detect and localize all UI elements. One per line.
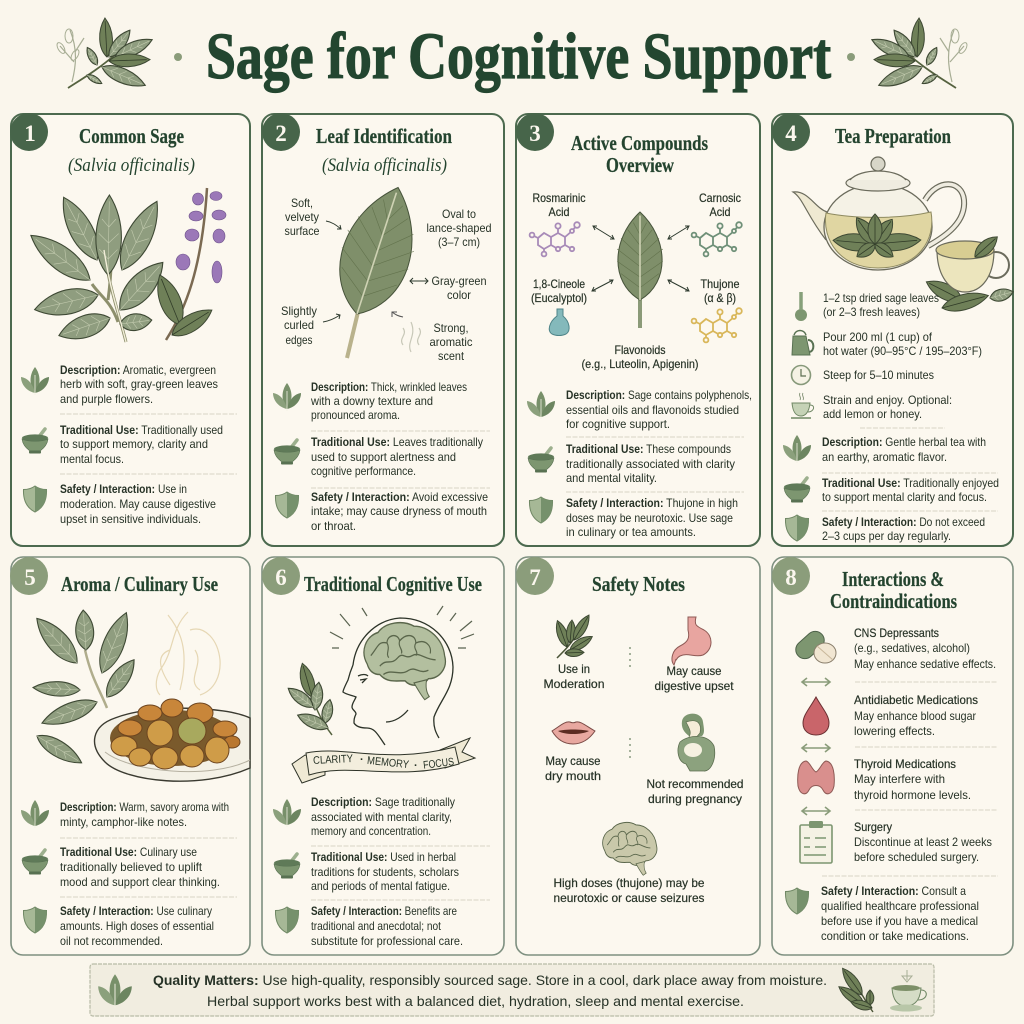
label bbox=[544, 662, 604, 691]
traditional use bbox=[22, 423, 223, 466]
safety: in culinary or tea amounts. bbox=[566, 525, 696, 539]
molecule: thujone bbox=[692, 308, 742, 342]
number badge 2 bbox=[262, 113, 300, 151]
heading: (Salvia officinalis) bbox=[68, 155, 195, 176]
compound labels: (Eucalyptol) bbox=[531, 291, 587, 305]
number badge 5: 5 bbox=[24, 565, 36, 590]
text: antidiabetic: lowering effects. bbox=[854, 724, 935, 738]
traditional use: Traditional Use: Traditionally enjoyed bbox=[822, 476, 999, 490]
icon: scent wisps bbox=[402, 322, 420, 352]
traditional use: traditionally associated with clarity bbox=[566, 457, 735, 471]
leaf labels: Strong, bbox=[434, 321, 468, 335]
safety: substitute for professional care. bbox=[311, 934, 463, 948]
leaf labels: color bbox=[447, 288, 471, 302]
text: CNS depressants bbox=[854, 626, 996, 671]
description: with a downy texture and bbox=[310, 394, 433, 408]
description: Description: Sage traditionally bbox=[311, 795, 455, 809]
panel: safety notes bbox=[516, 557, 760, 955]
safety bbox=[23, 482, 216, 526]
safety: traditional and anecdotal; not bbox=[311, 919, 442, 933]
label: Use in bbox=[558, 662, 590, 676]
steps bbox=[791, 291, 982, 421]
traditional use: Traditional Use: Culinary use bbox=[60, 845, 197, 859]
icon: sage sprig bbox=[836, 965, 874, 1012]
description bbox=[21, 800, 229, 829]
safety bbox=[529, 496, 738, 539]
traditional use: to support mental clarity and focus. bbox=[822, 490, 987, 504]
heading: Contraindications bbox=[830, 589, 957, 613]
text: thyroid bbox=[854, 757, 971, 802]
arrow bbox=[802, 807, 830, 815]
leaf labels: Soft, bbox=[291, 196, 313, 210]
heading: Overview bbox=[606, 153, 675, 177]
compound labels: Flavonoids bbox=[614, 343, 666, 357]
traditional use: traditions for students, scholars bbox=[311, 865, 459, 879]
banner: clarity memory focus bbox=[292, 738, 475, 783]
leaf labels: aromatic bbox=[430, 335, 472, 349]
number badge 7 bbox=[516, 557, 554, 595]
safety: Safety / Interaction: Use in bbox=[60, 482, 187, 496]
illustration: labelled leaf bbox=[324, 177, 431, 358]
traditional use: to support memory, clarity and bbox=[60, 437, 208, 451]
safety: before use if you have a medical bbox=[821, 914, 978, 928]
heading bbox=[68, 124, 195, 176]
illustration: glass teapot bbox=[793, 157, 964, 270]
steps: Pour 200 ml (1 cup) of bbox=[823, 330, 933, 344]
traditional use: Traditional Use: Used in herbal bbox=[311, 850, 456, 864]
text: surgery: Discontinue at least 2 weeks bbox=[854, 835, 992, 849]
compound labels: Rosmarinic bbox=[532, 191, 586, 205]
compound arrows bbox=[592, 226, 689, 291]
compound labels: (e.g., Luteolin, Apigenin) bbox=[582, 357, 699, 371]
panel frame bbox=[516, 114, 760, 546]
illustration: aroma steam bbox=[156, 612, 220, 695]
compound labels: Acid bbox=[548, 205, 570, 219]
footer callout: quality matters bbox=[90, 964, 934, 1016]
illustration: sage sprig bbox=[285, 662, 335, 735]
label: High doses (thujone) may be bbox=[554, 876, 705, 890]
safety bbox=[23, 904, 214, 948]
arrow bbox=[802, 678, 830, 686]
icon: header sage sprig left bbox=[55, 18, 155, 92]
description: pronounced aroma. bbox=[311, 408, 400, 422]
leaf labels: Oval to bbox=[442, 207, 476, 221]
safety: oil not recommended. bbox=[60, 934, 163, 948]
traditional use: Traditional Use: Traditionally used bbox=[60, 423, 223, 437]
text: quality matters bbox=[153, 972, 827, 1009]
panel frame bbox=[516, 557, 760, 955]
safety bbox=[785, 884, 979, 943]
safety: Safety / Interaction: Thujone in high bbox=[566, 496, 738, 510]
illustration: tea cup bbox=[923, 232, 1015, 315]
safety: qualified healthcare professional bbox=[821, 899, 979, 913]
description: and purple flowers. bbox=[60, 392, 153, 406]
description: essential oils and flavonoids studied bbox=[566, 403, 739, 417]
text: antidiabetic: Antidiabetic Medications bbox=[854, 693, 978, 707]
heading: Traditional Cognitive Use bbox=[304, 572, 482, 596]
description: Description: Aromatic, evergreen bbox=[60, 363, 216, 377]
steps: (or 2–3 fresh leaves) bbox=[823, 305, 920, 319]
description bbox=[783, 435, 986, 464]
heading: Leaf Identification bbox=[316, 124, 452, 148]
text: thyroid: thyroid hormone levels. bbox=[854, 788, 971, 802]
text: surgery bbox=[854, 820, 992, 864]
panel frame bbox=[11, 114, 250, 546]
leaf labels: lance-shaped bbox=[426, 221, 492, 235]
text: surgery: before scheduled surgery. bbox=[854, 850, 979, 864]
text: quality matters: Herbal support works best with a balanced diet, hydration, sleep and mental exercise. bbox=[207, 993, 744, 1009]
icon: pills bbox=[792, 628, 836, 663]
steps: Strain and enjoy. Optional: bbox=[823, 393, 952, 407]
icon: header sage sprig right bbox=[869, 18, 969, 92]
label: neurotoxic or cause seizures bbox=[554, 891, 704, 905]
safety bbox=[785, 515, 985, 543]
compound labels bbox=[531, 191, 741, 371]
label: Not recommended bbox=[646, 777, 744, 791]
panel: tea preparation bbox=[772, 113, 1015, 546]
description bbox=[273, 380, 467, 422]
panel frame bbox=[11, 557, 250, 955]
compound labels: Thujone bbox=[700, 277, 740, 291]
number badge 7: 7 bbox=[529, 565, 541, 590]
central leaf bbox=[617, 212, 663, 328]
icon: pregnant figure bbox=[678, 714, 715, 771]
label: during pregnancy bbox=[648, 792, 742, 806]
compound labels: Acid bbox=[710, 205, 730, 219]
illustration: head profile bbox=[343, 618, 453, 745]
safety: moderation. May cause digestive bbox=[60, 497, 216, 511]
label: dry mouth bbox=[545, 769, 601, 783]
molecule: carnosic acid bbox=[692, 222, 742, 256]
icon: stacked dots bbox=[629, 647, 631, 758]
leaf labels: Slightly bbox=[281, 304, 317, 318]
text: CNS depressants: (e.g., sedatives, alcohol) bbox=[854, 641, 970, 655]
leaf labels: surface bbox=[284, 224, 320, 238]
label bbox=[554, 876, 705, 905]
arrow bbox=[802, 744, 830, 752]
panel: interactions bbox=[772, 557, 1013, 955]
icon: spoon bbox=[795, 292, 807, 321]
callout frame bbox=[90, 964, 934, 1016]
title dot right bbox=[847, 53, 855, 61]
leaf labels: scent bbox=[438, 349, 465, 363]
safety: Safety / Interaction: Benefits are bbox=[311, 904, 457, 918]
panel frame bbox=[772, 114, 1013, 546]
description: for cognitive support. bbox=[566, 417, 670, 431]
traditional use bbox=[274, 435, 483, 478]
description bbox=[21, 363, 218, 406]
banner: clarity memory focus: · bbox=[360, 754, 364, 766]
title: Sage for Cognitive Support bbox=[206, 20, 831, 93]
number badge 6 bbox=[262, 557, 300, 595]
safety: doses may be neurotoxic. Use sage bbox=[566, 511, 733, 525]
traditional use: used to support alertness and bbox=[311, 450, 456, 464]
traditional use: and periods of mental fatigue. bbox=[311, 879, 450, 893]
illustration: brain bbox=[364, 623, 445, 700]
icon: clock bbox=[792, 366, 810, 384]
safety: intake; may cause dryness of mouth bbox=[311, 504, 487, 518]
traditional use: and mental vitality. bbox=[566, 471, 657, 485]
number badge 3 bbox=[516, 113, 554, 151]
traditional use: Traditional Use: These compounds bbox=[566, 442, 731, 456]
heading: (Salvia officinalis) bbox=[322, 155, 447, 176]
heading bbox=[316, 124, 452, 176]
illustration: flowering sage bbox=[150, 188, 226, 342]
traditional use bbox=[528, 442, 735, 485]
icon: cineole flask bbox=[549, 309, 569, 336]
description: Description: Warm, savory aroma with bbox=[60, 800, 229, 814]
panel frame bbox=[262, 557, 504, 955]
safety bbox=[275, 490, 488, 533]
icon: clipboard bbox=[800, 821, 832, 863]
text: antidiabetic: May enhance blood sugar bbox=[854, 709, 976, 723]
number badge 5 bbox=[10, 557, 48, 595]
compound labels: 1,8-Cineole bbox=[533, 277, 585, 291]
leaf labels: curled bbox=[284, 318, 314, 332]
panel frame bbox=[772, 557, 1013, 955]
leaf labels: Gray-green bbox=[432, 274, 486, 288]
panel: common sage bbox=[10, 113, 250, 546]
heading: Common Sage bbox=[79, 124, 184, 148]
banner: clarity memory focus: FOCUS bbox=[423, 756, 455, 772]
illustration: sage sprig bbox=[29, 609, 141, 770]
description: herb with soft, gray-green leaves bbox=[60, 377, 218, 391]
icon: lips bbox=[552, 722, 595, 744]
icon: thyroid bbox=[798, 761, 834, 794]
panel: active compounds bbox=[516, 113, 760, 546]
molecule: rosmarinic acid bbox=[530, 222, 580, 256]
description: Description: Thick, wrinkled leaves bbox=[311, 380, 467, 394]
description: memory and concentration. bbox=[311, 824, 431, 838]
safety: Safety / Interaction: Consult a bbox=[821, 884, 966, 898]
text: antidiabetic bbox=[854, 693, 978, 738]
safety: condition or take medications. bbox=[821, 929, 969, 943]
safety: Safety / Interaction: Do not exceed bbox=[822, 515, 985, 529]
number badge 4: 4 bbox=[785, 121, 797, 146]
heading bbox=[830, 567, 957, 613]
description bbox=[273, 795, 455, 838]
label: Moderation bbox=[544, 677, 604, 691]
label bbox=[545, 754, 601, 783]
text: CNS depressants: CNS Depressants bbox=[854, 626, 939, 640]
safety bbox=[275, 904, 463, 948]
label bbox=[654, 664, 734, 693]
text: surgery: Surgery bbox=[854, 820, 892, 834]
description: Description: Gentle herbal tea with bbox=[822, 435, 986, 449]
icon: leaf bbox=[98, 974, 132, 1008]
leaf labels bbox=[281, 196, 492, 363]
leaf labels: (3–7 cm) bbox=[438, 235, 480, 249]
traditional use bbox=[22, 845, 220, 889]
compound labels: (α & β) bbox=[704, 291, 736, 305]
label: May cause bbox=[546, 754, 601, 768]
heading bbox=[571, 131, 708, 177]
description: associated with mental clarity, bbox=[311, 810, 452, 824]
panel: traditional cognitive use bbox=[262, 557, 504, 955]
banner: clarity memory focus: CLARITY bbox=[313, 753, 354, 767]
icon: brain bbox=[603, 822, 657, 875]
traditional use: cognitive performance. bbox=[311, 464, 416, 478]
number badge 8: 8 bbox=[785, 565, 797, 590]
arrows bbox=[323, 221, 428, 322]
icon: cup bbox=[791, 393, 814, 418]
steps: Steep for 5–10 minutes bbox=[823, 368, 934, 382]
illustration: sage plant bbox=[24, 192, 172, 346]
safety: Safety / Interaction: Use culinary bbox=[60, 904, 212, 918]
description bbox=[527, 388, 752, 431]
heading: Tea Preparation bbox=[835, 124, 951, 148]
number badge 8 bbox=[772, 557, 810, 595]
description: an earthy, aromatic flavor. bbox=[822, 450, 947, 464]
steps: 1–2 tsp dried sage leaves bbox=[823, 291, 939, 305]
description: minty, camphor-like notes. bbox=[60, 815, 187, 829]
number badge 4 bbox=[772, 113, 810, 151]
safety: 2–3 cups per day regularly. bbox=[822, 529, 951, 543]
number badge 6: 6 bbox=[275, 565, 287, 590]
illustration: thought rays bbox=[330, 606, 474, 648]
steps: add lemon or honey. bbox=[823, 407, 922, 421]
icon: stomach bbox=[672, 617, 711, 665]
traditional use: Traditional Use: Leaves traditionally bbox=[311, 435, 483, 449]
safety: amounts. High doses of essential bbox=[60, 919, 214, 933]
panel frame bbox=[262, 114, 504, 546]
steps: hot water (90–95°C / 195–203°F) bbox=[823, 344, 982, 358]
label bbox=[646, 777, 744, 806]
heading: Active Compounds bbox=[571, 131, 708, 155]
panel: aroma culinary use bbox=[10, 557, 250, 955]
label: May cause bbox=[666, 664, 722, 678]
icon: tea cup bbox=[890, 970, 926, 1012]
text: thyroid: May interfere with bbox=[854, 772, 945, 786]
heading: Aroma / Culinary Use bbox=[61, 572, 218, 596]
banner: clarity memory focus: MEMORY bbox=[366, 755, 410, 771]
safety: or throat. bbox=[311, 519, 356, 533]
compound labels: Carnosic bbox=[699, 191, 741, 205]
traditional use: mental focus. bbox=[60, 452, 124, 466]
text: quality matters: Quality Matters: Use high-quality, responsibly sourced sage. Store in a cool, dark place away from moisture. bbox=[153, 972, 827, 988]
leaf labels: edges bbox=[286, 333, 312, 347]
icon: sage moderation bbox=[553, 613, 595, 658]
number badge 1: 1 bbox=[24, 121, 36, 146]
number badge 1 bbox=[10, 113, 48, 151]
label: digestive upset bbox=[654, 679, 734, 693]
traditional use bbox=[274, 850, 459, 893]
text: CNS depressants: May enhance sedative effects. bbox=[854, 657, 996, 671]
text: thyroid: Thyroid Medications bbox=[854, 757, 956, 771]
icon: kettle bbox=[792, 330, 813, 355]
traditional use bbox=[784, 476, 999, 504]
heading: Interactions & bbox=[842, 567, 944, 591]
description: Description: Sage contains polyphenols, bbox=[566, 388, 752, 402]
safety: upset in sensitive individuals. bbox=[60, 512, 201, 526]
traditional use: traditionally believed to uplift bbox=[60, 860, 203, 874]
number badge 2: 2 bbox=[275, 121, 287, 146]
banner: clarity memory focus: · bbox=[414, 760, 418, 772]
number badge 3: 3 bbox=[529, 121, 541, 146]
illustration: plate of roasted potatoes bbox=[95, 699, 250, 781]
icon: blood drop bbox=[803, 697, 829, 735]
safety: Safety / Interaction: Avoid excessive bbox=[311, 490, 488, 504]
heading: Safety Notes bbox=[592, 572, 685, 596]
leaf labels: velvety bbox=[285, 210, 319, 224]
panel: leaf identification bbox=[262, 113, 504, 546]
traditional use: mood and support clear thinking. bbox=[60, 875, 220, 889]
title dot left bbox=[174, 53, 182, 61]
